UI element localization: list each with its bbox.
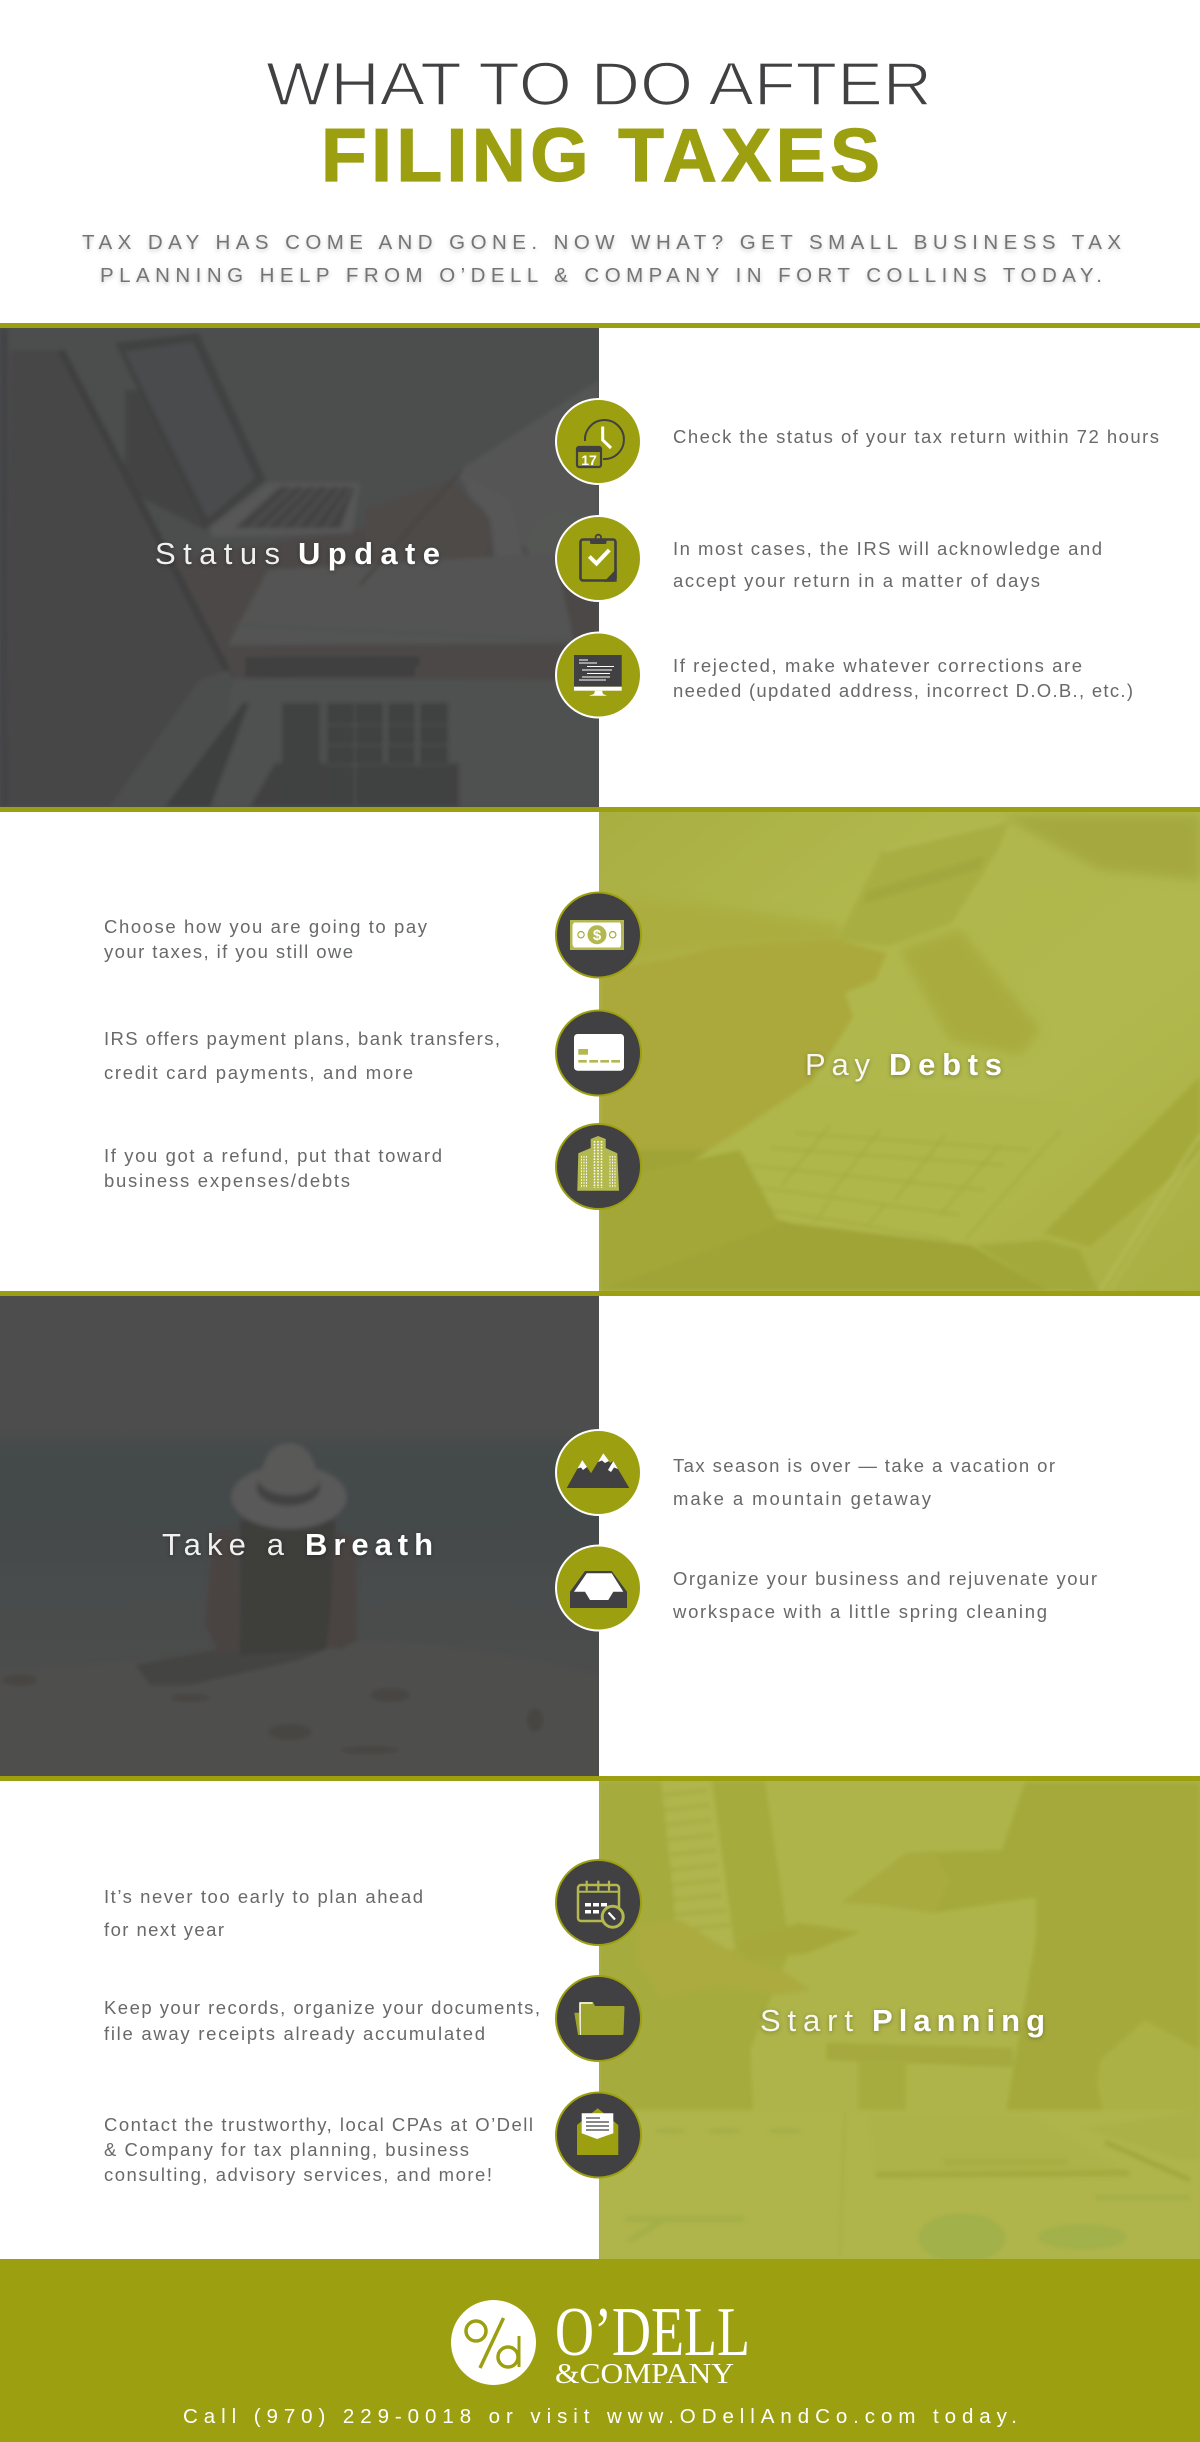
text block: pay debts points: credit card payments, and more — [104, 1062, 413, 1083]
heading: status update: Status — [155, 536, 280, 571]
icon: folder — [556, 1976, 641, 2061]
text block: status update points: If rejected, make whatever corrections are — [673, 655, 1082, 676]
logo wordmark: O’DELL — [555, 2294, 750, 2371]
icon: clipboard with check — [556, 516, 641, 601]
text block: take a breath points: Organize your business and rejuvenate your — [673, 1568, 1097, 1589]
icon: office building — [556, 1124, 641, 1209]
icon: envelope with letter — [556, 2092, 641, 2178]
panel: pay debts photo — [599, 812, 1200, 1291]
text block: take a breath points: make a mountain getaway — [673, 1488, 932, 1509]
subtitle: TAX DAY HAS COME AND GONE. NOW WHAT? GET SMALL BUSINESS TAX — [82, 231, 1121, 254]
heading: status update — [155, 536, 440, 571]
icon: dollar bill: $ — [593, 927, 602, 944]
text block: start planning points: file away receipts already accumulated — [104, 2023, 485, 2044]
text block: pay debts points: IRS offers payment plans, bank transfers, — [104, 1028, 500, 1049]
logo mark — [451, 2300, 536, 2385]
subtitle: PLANNING HELP FROM O’DELL & COMPANY IN FORT COLLINS TODAY. — [100, 264, 1102, 287]
icon: calendar with clock — [556, 1860, 641, 1945]
heading: status update: Update — [298, 536, 440, 571]
icon: dollar bill — [556, 892, 641, 978]
icon: clock and calendar: 17 — [581, 452, 597, 468]
footer call to action: Call (970) 229-0018 or visit www.ODellAndCo.com today. — [183, 2405, 1017, 2428]
heading: take a breath: Breath — [305, 1527, 433, 1562]
subtitle — [82, 231, 1121, 287]
panel: start planning photo — [599, 1781, 1200, 2263]
text block: pay debts points: If you got a refund, put that toward — [104, 1145, 442, 1166]
text block: start planning points: for next year — [104, 1919, 224, 1940]
footer logo — [451, 2294, 750, 2390]
text block: pay debts points: your taxes, if you still owe — [104, 941, 353, 962]
footer band — [0, 2259, 1200, 2442]
heading: take a breath: Take a — [162, 1527, 285, 1562]
text block: pay debts points: Choose how you are going to pay — [104, 916, 428, 937]
text block: start planning points: It’s never too early to plan ahead — [104, 1886, 423, 1907]
text block: status update points: needed (updated address, incorrect D.O.B., etc.) — [673, 680, 1133, 701]
text block: take a breath points: Tax season is over — take a vacation or — [673, 1455, 1055, 1476]
text block: pay debts points: business expenses/debts — [104, 1170, 350, 1191]
heading: take a breath — [162, 1527, 433, 1562]
text block: start planning points: Keep your records, organize your documents, — [104, 1997, 540, 2018]
title line two: FILING TAXES — [321, 113, 880, 197]
heading: start planning: Planning — [872, 2003, 1045, 2038]
text block: pay debts points — [104, 916, 500, 1191]
text block: start planning points: consulting, advisory services, and more! — [104, 2164, 492, 2185]
text block: status update points — [673, 426, 1159, 701]
heading: pay debts: Debts — [889, 1047, 1002, 1082]
heading: pay debts — [805, 1047, 1002, 1082]
text block: start planning points — [104, 1886, 540, 2185]
text block: take a breath points: workspace with a little spring cleaning — [672, 1601, 1047, 1622]
text block: take a breath points — [672, 1455, 1097, 1622]
heading: start planning — [760, 2003, 1045, 2038]
title line one: WHAT TO DO AFTER — [266, 50, 932, 118]
panel: status update photo — [0, 328, 599, 807]
icon: mountains — [556, 1430, 641, 1515]
icon: clock and calendar — [556, 399, 641, 484]
text block: start planning points: & Company for tax planning, business — [104, 2139, 469, 2160]
logo subline: &COMPANY — [555, 2358, 734, 2390]
header — [82, 50, 1121, 287]
text block: status update points: Check the status of your tax return within 72 hours — [673, 426, 1159, 447]
icon: inbox tray — [556, 1546, 641, 1630]
panel: take a breath photo — [0, 1296, 599, 1776]
heading: pay debts: Pay — [805, 1047, 870, 1082]
icon: credit card — [556, 1010, 641, 1096]
text block: start planning points: Contact the trustworthy, local CPAs at O’Dell — [104, 2114, 533, 2135]
text block: status update points: accept your return in a matter of days — [673, 570, 1040, 591]
heading: start planning: Start — [760, 2003, 853, 2038]
divider bars — [0, 323, 1200, 1781]
text block: status update points: In most cases, the IRS will acknowledge and — [673, 538, 1102, 559]
icon: computer monitor — [556, 632, 641, 718]
